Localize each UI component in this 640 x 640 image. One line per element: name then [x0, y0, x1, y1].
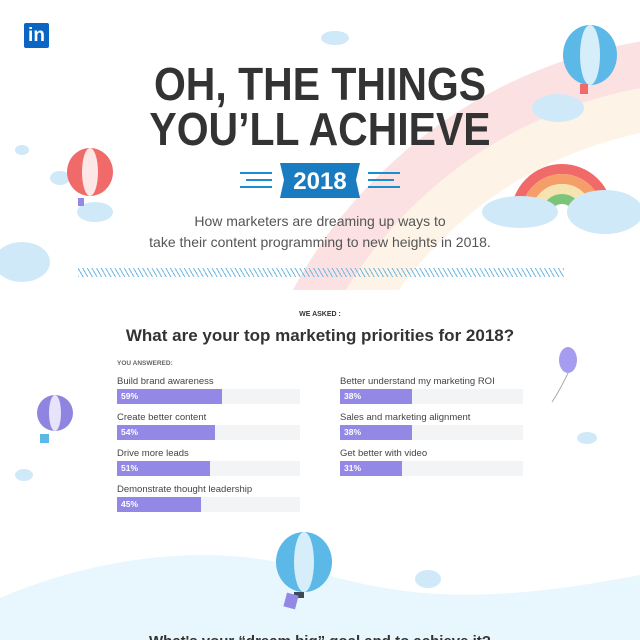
small rainbow — [516, 169, 608, 215]
bar chart: 54% — [121, 427, 138, 437]
subtitle: How marketers are dreaming up ways to — [194, 213, 446, 229]
bar chart: Sales and marketing alignment — [340, 412, 470, 423]
bar chart: YOU ANSWERED: — [117, 360, 173, 367]
bar chart: 38% — [344, 391, 361, 401]
bar chart: 45% — [121, 499, 138, 509]
bar chart: 31% — [344, 463, 361, 473]
title: YOU’LL ACHIEVE — [149, 103, 491, 155]
bar chart: 59% — [121, 391, 138, 401]
subtitle — [149, 213, 491, 250]
bar chart — [117, 360, 523, 512]
year badge — [240, 163, 400, 198]
bar chart: Get better with video — [340, 448, 427, 459]
bar chart: Better understand my marketing ROI — [340, 376, 495, 387]
bar chart: Drive more leads — [117, 448, 189, 459]
title — [149, 58, 491, 155]
hatched divider — [78, 268, 564, 277]
year badge: 2018 — [293, 168, 347, 195]
title: OH, THE THINGS — [154, 58, 486, 110]
balloons — [563, 25, 617, 94]
bar chart: Build brand awareness — [117, 376, 214, 387]
subtitle: take their content programming to new heights in 2018. — [149, 234, 491, 250]
bar chart: 38% — [344, 427, 361, 437]
question header — [126, 311, 514, 345]
bar chart: Demonstrate thought leadership — [117, 484, 252, 495]
question header: WE ASKED : — [299, 311, 341, 318]
bar chart: Create better content — [117, 412, 206, 423]
question header: What are your top marketing priorities for 2018? — [126, 326, 514, 345]
bottom wave — [0, 555, 640, 640]
logo: in — [28, 25, 45, 46]
logo — [24, 23, 49, 48]
bar chart: 51% — [121, 463, 138, 473]
